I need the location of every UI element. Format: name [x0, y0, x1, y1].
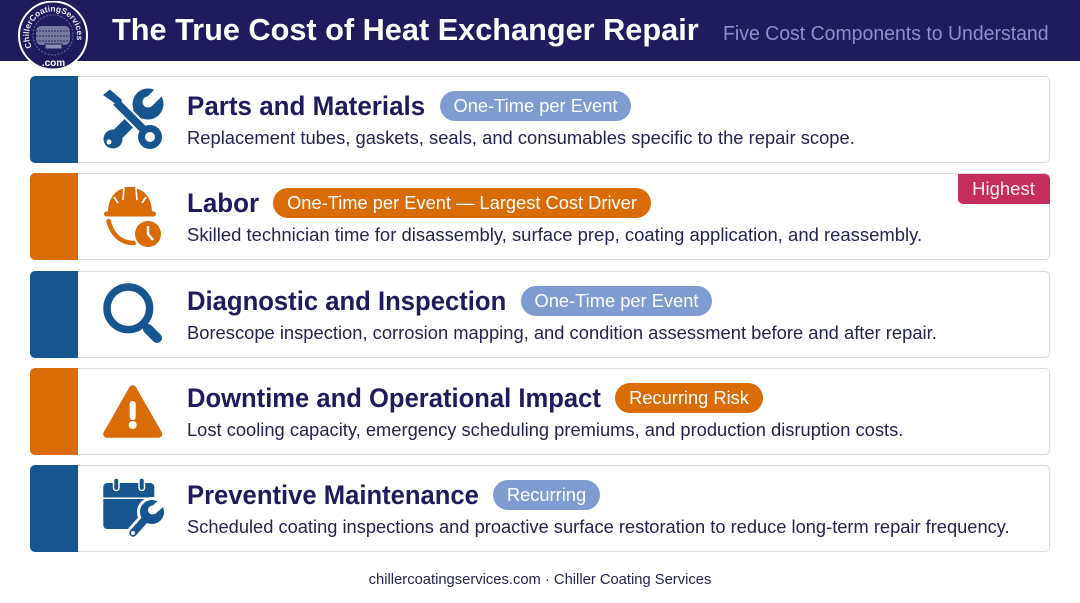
icon: warning triangle: [103, 385, 162, 438]
title: The True Cost of Heat Exchanger Repair: [112, 12, 699, 47]
description: Lost cooling capacity, emergency scheduling premiums, and production disruption costs.: [186, 419, 903, 440]
badge: highest: Highest: [972, 178, 1035, 198]
panel: diagnostic and inspection: [30, 271, 1050, 358]
heading: Downtime and Operational Impact: [186, 383, 600, 413]
tag: [440, 90, 631, 120]
heading: Preventive Maintenance: [186, 480, 478, 510]
tag: One-Time per Event: [535, 290, 698, 310]
icon: magnifying glass: [103, 283, 162, 343]
description: Borescope inspection, corrosion mapping, and condition assessment before and after repair.: [186, 322, 936, 343]
footer: chillercoatingservices.com · Chiller Coating Services: [369, 572, 711, 588]
icon: calendar and wrench: [103, 478, 164, 537]
tag: [615, 382, 763, 412]
icon: hard hat and clock: [104, 187, 161, 247]
tag: Recurring: [507, 484, 586, 504]
subtitle: Five Cost Components to Understand: [723, 23, 1049, 45]
tag: [493, 480, 600, 510]
logo badge: .com: [42, 58, 65, 69]
heading: Labor: [186, 188, 259, 218]
tag: Recurring Risk: [629, 386, 749, 408]
heading: Parts and Materials: [186, 91, 425, 121]
tag: [273, 188, 651, 218]
tag: One-Time per Event: [454, 94, 617, 116]
badge: highest: [958, 174, 1050, 204]
tag: [521, 286, 712, 316]
panel: parts and materials: [30, 76, 1050, 163]
heading: Diagnostic and Inspection: [186, 286, 506, 316]
icon: screwdriver and wrench: [103, 88, 164, 149]
panel: labor: [30, 173, 1050, 260]
tag: One-Time per Event — Largest Cost Driver: [287, 192, 637, 212]
logo badge: ChillerCoatingServices: [22, 6, 82, 48]
description: Skilled technician time for disassembly, surface prep, coating application, and reassembly.: [186, 224, 922, 245]
panel: preventive maintenance: [30, 465, 1050, 552]
logo badge: [18, 1, 88, 69]
header band: [0, 0, 1080, 61]
description: Scheduled coating inspections and proactive surface restoration to reduce long-term repair frequency.: [186, 516, 1009, 537]
description: Replacement tubes, gaskets, seals, and consumables specific to the repair scope.: [186, 127, 854, 148]
panel: downtime and operational impact: [30, 368, 1050, 455]
